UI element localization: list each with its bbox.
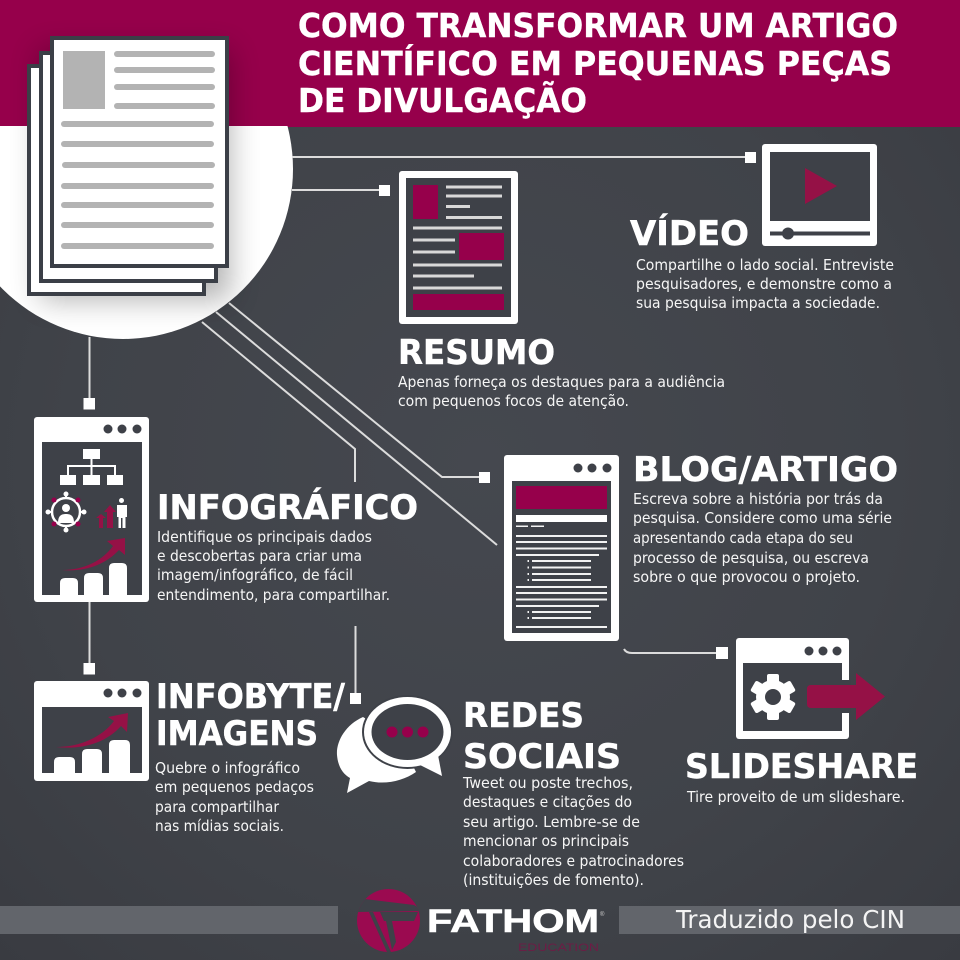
text: social media description [462,774,684,889]
text: video description [636,256,894,312]
logo: Fathom Education [355,889,605,954]
icon: stack of scientific papers [29,38,230,300]
heading: redes sociais: SOCIAIS [463,737,621,777]
connector: paper to redes sociais [202,322,361,704]
text: blog description: processo de pesquisa, ou escreva [633,549,869,567]
text: infobyte description: para compartilhar [155,798,280,816]
text: video description: sua pesquisa impacta a sociedade. [636,294,880,312]
text: infographic description [157,528,390,604]
text: infobyte description: em pequenos pedaços [155,778,314,796]
text: social media description: mencionar os principais [463,832,629,850]
heading: slideshare: SLIDESHARE [685,747,918,787]
heading: resumo: RESUMO [398,333,555,373]
title: CIENTÍFICO EM PEQUENAS PEÇAS [298,43,892,83]
title: COMO TRANSFORMAR UM ARTIGO [298,6,898,45]
connector: paper to blog [229,303,490,483]
text: blog description: Escreva sobre a história por trás da [633,490,883,508]
credit text: Traduzido pelo CIN [675,905,905,934]
education label: EDUCATION [518,942,599,954]
heading: infobyte/imagens [156,677,346,754]
heading: infografico: INFOGRÁFICO [157,487,418,528]
text: social media description: (instituições de fomento). [463,871,644,889]
heading: redes sociais: REDES [463,696,584,736]
text: social media description: seu artigo. Lembre-se de [463,813,640,831]
heading: redes sociais [463,696,621,777]
heading: blog/artigo: BLOG/ARTIGO [633,450,898,490]
registered mark: ® [600,911,605,918]
wordmark: FATHOM [427,903,599,939]
icon: infobyte window [34,681,149,781]
connector: paper to infographic [84,337,95,410]
bar chart [54,740,130,773]
text: infobyte description: nas mídias sociais. [155,817,284,835]
text: infobyte description: Quebre o infográfico [155,759,300,777]
text: social media description: Tweet ou poste trechos, [462,774,633,792]
text: social media description: colaboradores e patrocinadores [463,852,684,870]
text: infographic description: entendimento, para compartilhar. [157,586,390,604]
rising arrow [56,713,128,748]
text: slideshare description: Tire proveito de um slideshare. [686,788,905,806]
connector: paper to resumo [292,185,390,196]
businessman figure [117,498,127,528]
logo mark [355,889,424,952]
arrow [807,673,885,720]
bar chart [60,563,127,595]
title: DE DIVULGAÇÃO [298,80,587,120]
connector: paper to video [292,152,756,163]
footer bar left [0,906,338,934]
heading: infobyte/imagens: INFOBYTE/ [156,677,346,717]
people network icon [46,492,86,532]
text: blog description: sobre o que provocou o projeto. [633,568,860,586]
text: video description: pesquisadores, e demonstre como a [636,275,892,293]
text: blog description: pesquisa. Considere como uma série [633,509,892,527]
heading: infobyte/imagens: IMAGENS [156,714,318,754]
connector: paper to slideshare [216,312,728,659]
heading: video: VÍDEO [630,213,749,254]
text: infobyte description [155,759,314,835]
icon: resumo document [399,171,518,324]
rising arrow [62,538,125,570]
white circle behind paper stack [0,126,293,339]
icon: infographic page [34,417,149,602]
text: resumo description: Apenas forneça os destaques para a audiência [398,373,725,391]
gear [750,674,796,720]
icon: video player [762,144,877,246]
text: resumo description [398,373,725,410]
text: blog description [633,490,892,586]
title [298,6,898,120]
footer bar right [619,906,960,934]
text: resumo description: com pequenos focos de atenção. [398,392,629,410]
icon: chat bubbles [337,695,453,793]
icon: slideshare window [736,638,885,739]
small growth arrows [96,505,116,528]
org chart [60,449,123,485]
header band [0,0,960,127]
connector: infographic to infobyte [84,600,95,674]
text: infographic description: Identifique os principais dados [157,528,372,546]
text: blog description: apresentando cada etapa do seu [633,529,853,547]
text: video description: Compartilhe o lado social. Entreviste [636,256,894,274]
text: infographic description: e descobertas para criar uma [157,547,362,565]
icon: blog page [504,455,619,641]
text: infographic description: imagem/infográfico, de fácil [157,566,353,584]
text: social media description: destaques e citações do [463,793,632,811]
